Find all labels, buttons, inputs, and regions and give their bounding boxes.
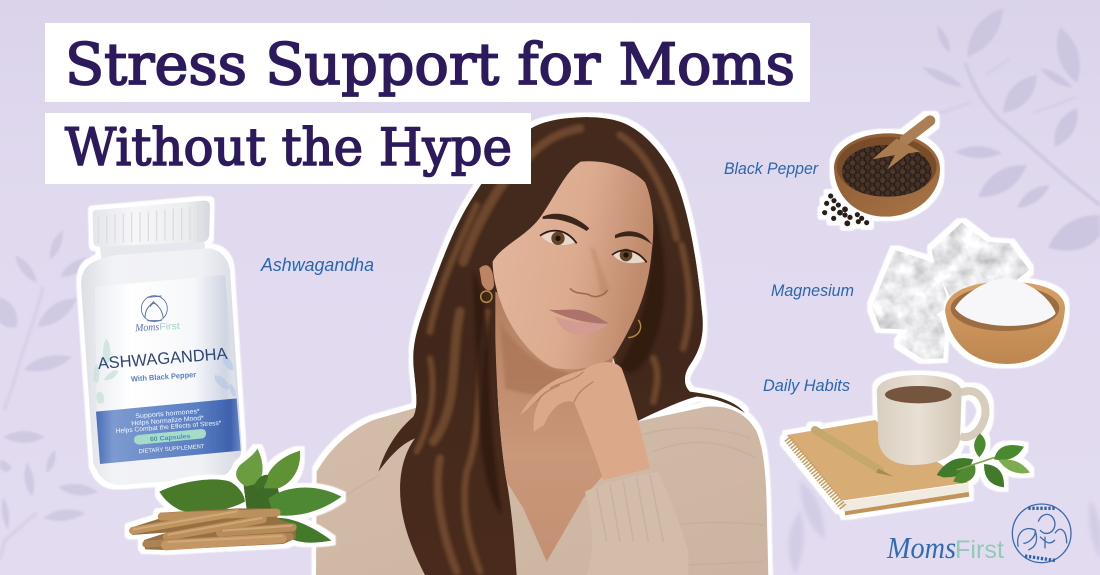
ceramic bowl (945, 282, 1065, 364)
rock top (932, 223, 1029, 297)
bowl inner (837, 137, 937, 197)
chest and neck (495, 292, 613, 562)
black pepper bowl (822, 121, 940, 226)
dark hair shadow right of face (620, 212, 665, 372)
product subtitle: With Black Pepper (131, 370, 196, 384)
band benefit text: Helps Combat the Effects of Stress* (115, 420, 222, 435)
label leaf decoration right (215, 353, 236, 397)
product bottle (81, 201, 242, 485)
label blue band (96, 398, 241, 464)
capsule count pill: 60 Capsules (150, 433, 191, 443)
logo wordmark first: First (955, 536, 1004, 564)
ashwagandha leaves (159, 448, 342, 543)
wooden scoop (872, 121, 930, 169)
band benefit text: Helps Normalize Mood* (131, 415, 204, 428)
title line 2: Without the Hype (65, 119, 512, 178)
rock small (898, 310, 945, 359)
woman portrait (316, 117, 768, 575)
sweater shading (327, 428, 763, 565)
logo family emblem (1012, 504, 1071, 563)
right eyebrow (615, 231, 652, 244)
sweater right sleeve (585, 472, 688, 575)
bottle label (95, 275, 237, 412)
dark hair shadow near neck (473, 272, 502, 515)
title box line 2 (45, 113, 531, 184)
product name: ASHWAGANDHA (97, 344, 229, 373)
label: black pepper: Black Pepper (724, 160, 819, 178)
title box line 1 (45, 23, 810, 102)
neck shading (500, 322, 615, 395)
sprig leaves (937, 433, 1030, 487)
left eye (540, 231, 577, 245)
label leaf decoration left (93, 338, 118, 403)
background leaf shadows: left (0, 230, 98, 560)
pen (815, 430, 893, 477)
bottle body (81, 248, 242, 485)
wooden bowl (834, 133, 940, 217)
left earring (481, 291, 492, 302)
face (493, 161, 653, 369)
background leaf shadows: lower right (789, 480, 1100, 575)
label: magnesium: Magnesium (771, 282, 854, 300)
notebook cover and pages (787, 420, 969, 515)
coffee cup handle (960, 391, 985, 437)
left eyebrow (543, 214, 589, 231)
dietary supplement text: DIETARY SUPPLEMENT (138, 444, 205, 455)
logo wordmark moms: Moms (886, 530, 956, 565)
rock left (872, 250, 947, 330)
bottle logo wordmark: Moms (134, 322, 159, 334)
brand logo (886, 504, 1071, 565)
band benefit text: Supports hormones* (135, 408, 200, 420)
nose (570, 248, 610, 297)
notebook, pen, cup and leaves (787, 375, 1030, 515)
sweater (316, 406, 768, 575)
right eye (612, 249, 647, 263)
ashwagandha leaves and roots (132, 448, 342, 550)
bottle neck (99, 237, 206, 262)
bottle lid (93, 201, 210, 247)
label: ashwagandha: Ashwagandha (260, 255, 374, 275)
magnesium rocks and powder bowl (872, 223, 1065, 364)
hair silhouette (378, 117, 745, 575)
capsule count pill (134, 429, 206, 445)
bottle logo wordmark second part: First (159, 321, 180, 333)
coffee cup (877, 375, 962, 465)
bowl inner rim (951, 286, 1059, 331)
title line 1: Stress Support for Moms (65, 32, 795, 98)
right earring (628, 320, 641, 338)
peppercorns in bowl (842, 145, 932, 197)
hair highlight strands (417, 128, 689, 572)
label: daily habits: Daily Habits (763, 377, 850, 395)
hand (520, 362, 650, 480)
coffee (885, 386, 952, 403)
background leaf shadows: top right (922, 8, 1100, 251)
ashwagandha roots (132, 508, 296, 550)
bottle logo circle (141, 296, 167, 322)
notebook spiral (787, 438, 843, 507)
ear (479, 265, 494, 290)
scattered peppercorns (822, 193, 869, 226)
band benefit text (115, 408, 222, 435)
white powder (955, 278, 1056, 326)
lips (548, 309, 609, 334)
